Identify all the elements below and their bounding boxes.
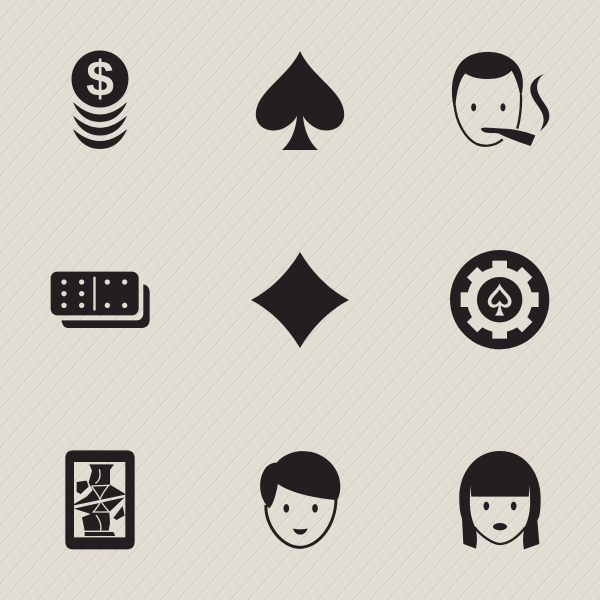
icon: domino tiles bbox=[51, 272, 150, 328]
face outline bbox=[475, 527, 525, 544]
cigar bbox=[481, 128, 535, 146]
icon: girl face bbox=[459, 451, 541, 549]
hair bbox=[452, 52, 523, 108]
pips bbox=[61, 279, 127, 308]
icon: spade bbox=[256, 51, 344, 150]
icon: casino chip bbox=[450, 250, 549, 349]
figure lines bbox=[92, 469, 110, 531]
eyes bbox=[283, 504, 289, 513]
icon: coin stack bbox=[72, 50, 128, 149]
face outline bbox=[266, 497, 336, 547]
icon: boy face bbox=[260, 451, 340, 547]
hair bbox=[459, 451, 541, 549]
hair bbox=[260, 451, 340, 508]
icon: playing card bbox=[65, 450, 135, 549]
mouth bbox=[293, 528, 308, 535]
front tile bbox=[51, 272, 139, 315]
back tile bbox=[62, 284, 150, 328]
king figure bbox=[74, 464, 125, 536]
gear bbox=[461, 261, 539, 339]
icon: smoking man bbox=[452, 52, 549, 146]
dollar sign: $ bbox=[86, 51, 114, 107]
face outline bbox=[455, 95, 521, 146]
eyes bbox=[483, 502, 489, 510]
eyes bbox=[471, 103, 476, 111]
smoke bbox=[530, 74, 549, 131]
icon: diamond bbox=[251, 252, 349, 348]
divider bbox=[93, 277, 96, 311]
spade bbox=[488, 283, 512, 316]
mouth bbox=[493, 523, 507, 530]
